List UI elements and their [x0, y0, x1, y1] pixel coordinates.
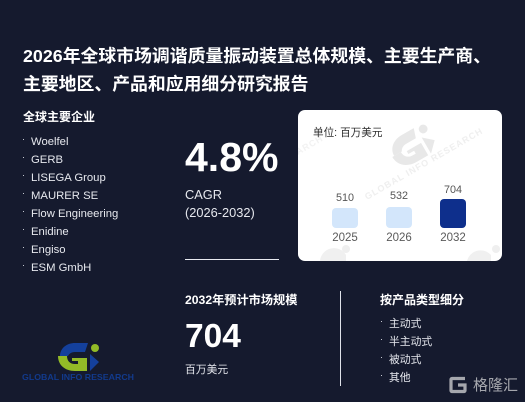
- CAGR underline: [185, 259, 279, 260]
- logo wordmark: GLOBAL INFO RESEARCH: [22, 372, 134, 382]
- panel: product type segments: [380, 293, 464, 384]
- product type list: 被动式: [389, 354, 421, 366]
- company list: Flow Engineering: [31, 208, 118, 220]
- CAGR label: (2026-2032): [185, 205, 255, 220]
- market size unit: 百万美元: [185, 364, 228, 376]
- heading: key companies: 全球主要企业: [23, 110, 95, 124]
- company list: ESM GmbH: [31, 262, 91, 274]
- company list: [23, 136, 118, 274]
- heading: by product type: 按产品类型细分: [380, 293, 464, 307]
- CAGR label: CAGR: [185, 187, 222, 202]
- heading: 2032 market size: 2032年预计市场规模: [185, 293, 297, 307]
- year 2026: 2026: [386, 232, 412, 244]
- value 704: 704: [444, 184, 462, 196]
- year 2032: 2032: [440, 232, 466, 244]
- product type list: 半主动式: [389, 336, 432, 348]
- title: 主要地区、产品和应用细分研究报告: [23, 74, 308, 94]
- title: 2026年全球市场调谐质量振动装置总体规模、主要生产商、: [23, 46, 491, 66]
- unit label: 单位: 百万美元: [313, 127, 382, 139]
- watermark: GLOBAL INFO RESEARCH: [363, 126, 485, 202]
- company list: MAURER SE: [31, 190, 98, 202]
- bar: [386, 207, 412, 228]
- panel: market size bar chart card: [298, 110, 502, 261]
- icon: G mark: [449, 376, 467, 394]
- title: [23, 46, 491, 94]
- vertical divider: [340, 291, 341, 386]
- company list: Enidine: [31, 226, 69, 238]
- product type list: [381, 318, 432, 384]
- Gelonghui text: 格隆汇: [473, 377, 518, 394]
- product type list: 其他: [389, 372, 411, 384]
- company list: Engiso: [31, 244, 66, 256]
- year 2025: 2025: [332, 232, 358, 244]
- company list: GERB: [31, 154, 63, 166]
- panel: CAGR: [185, 134, 279, 260]
- product type list: 主动式: [389, 318, 421, 330]
- bar: [440, 199, 466, 228]
- bar 2032: [440, 184, 466, 244]
- panel: key companies: [23, 110, 118, 274]
- watermark: [298, 124, 500, 261]
- value 510: 510: [336, 192, 354, 204]
- bar 2025: [332, 192, 358, 244]
- bar: [332, 208, 358, 228]
- market size value: 704: [185, 318, 241, 355]
- CAGR value: 4.8%: [185, 134, 278, 180]
- bar 2026: [386, 190, 412, 244]
- icon: Global Info Research logo: [22, 343, 134, 382]
- icon: Gelonghui watermark: [449, 376, 518, 394]
- CAGR label: [185, 187, 255, 220]
- company list: Woelfel: [31, 136, 68, 148]
- value 532: 532: [390, 190, 408, 202]
- panel: 2032 market size: [185, 293, 298, 376]
- company list: LISEGA Group: [31, 172, 106, 184]
